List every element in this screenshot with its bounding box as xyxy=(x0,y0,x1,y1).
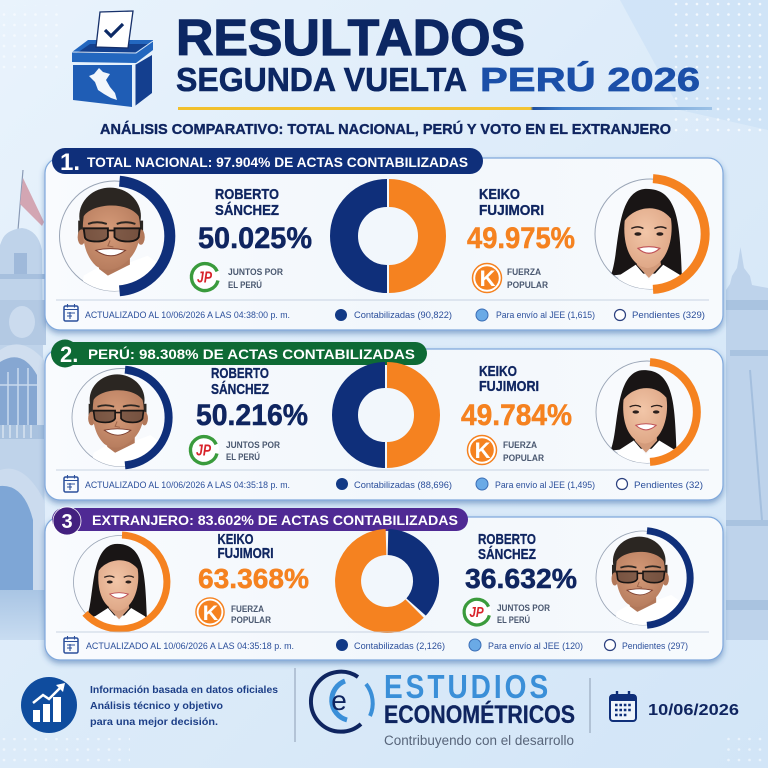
note text: Análisis técnico y objetivo xyxy=(90,700,223,712)
subtitle: ANÁLISIS COMPARATIVO: TOTAL NACIONAL, PERÚ Y VOTO EN EL EXTRANJERO xyxy=(100,120,671,138)
icon: calendar xyxy=(64,304,78,321)
party name: POPULAR xyxy=(231,615,271,626)
heading: Perú: 2. xyxy=(60,342,78,367)
portrait: Keiko Fujimori xyxy=(596,361,698,463)
portrait: Keiko Fujimori xyxy=(595,179,705,289)
title: Segunda Vuelta: SEGUNDA VUELTA xyxy=(176,61,467,98)
icon: rising bar chart xyxy=(21,677,77,733)
legend: Contabilizadas (90,822) xyxy=(354,310,452,321)
heading: extranjero: EXTRANJERO: 83.602% DE ACTAS CONTABILIZADAS xyxy=(92,512,458,528)
party name: FUERZA xyxy=(231,604,264,615)
vote share: 36.632% xyxy=(465,563,577,594)
logo word: Econométricos: ECONOMÉTRICOS xyxy=(384,700,575,729)
vote share: 50.216% xyxy=(196,399,308,432)
heading: extranjero xyxy=(52,507,468,535)
icon: date calendar xyxy=(610,691,636,721)
candidate name: SÁNCHEZ xyxy=(215,202,279,219)
date: 10/06/2026 xyxy=(648,702,739,719)
vote share: 63.368% xyxy=(198,563,309,594)
icon: calendar xyxy=(64,636,78,653)
party logo: Juntos por el Perú xyxy=(189,435,219,465)
legend: Para envío al JEE (1,615) xyxy=(496,310,595,321)
candidate name: KEIKO xyxy=(479,364,517,380)
portrait: Roberto Sánchez xyxy=(60,181,170,291)
candidate name xyxy=(479,364,539,395)
party name: POPULAR xyxy=(503,453,544,464)
legend xyxy=(336,639,688,652)
vote share: 49.975% xyxy=(467,222,575,255)
heading: total nacional: 1. xyxy=(60,149,80,176)
icon: ballot box xyxy=(72,11,153,107)
heading: extranjero: 3 xyxy=(61,511,73,533)
candidate name xyxy=(211,366,269,398)
rule under title xyxy=(178,107,712,110)
party name: EL PERÚ xyxy=(228,279,262,291)
party name: EL PERÚ xyxy=(226,451,260,463)
party logo: Juntos por el Perú xyxy=(190,262,220,292)
portrait: Roberto Sánchez xyxy=(72,368,170,466)
candidate name: ROBERTO xyxy=(478,532,536,548)
logo word: Estudios: ESTUDIOS xyxy=(384,669,551,706)
note text: para una mejor decisión. xyxy=(90,716,218,728)
party name: EL PERÚ xyxy=(497,614,530,626)
legend xyxy=(335,309,705,321)
donut chart xyxy=(348,542,426,620)
donut chart xyxy=(345,375,427,455)
candidate name: FUJIMORI xyxy=(479,203,544,219)
portrait: Roberto Sánchez xyxy=(596,531,690,625)
legend: Contabilizadas (2,126) xyxy=(354,641,445,652)
party logo: Fuerza Popular xyxy=(196,598,224,626)
legend: Para envío al JEE (120) xyxy=(488,641,583,652)
logo: Estudios Econométricos emblem: e xyxy=(331,685,347,716)
heading: total nacional xyxy=(52,148,483,176)
party name xyxy=(228,267,283,291)
party name xyxy=(503,440,544,464)
legend: Pendientes (32) xyxy=(634,480,703,491)
candidate name xyxy=(218,532,274,562)
candidate name xyxy=(478,532,536,563)
candidate name: ROBERTO xyxy=(211,366,269,382)
party logo: Fuerza Popular xyxy=(472,264,502,292)
icon: calendar xyxy=(64,475,78,492)
party name xyxy=(497,603,550,626)
party name: JUNTOS POR xyxy=(226,440,280,451)
candidate name: KEIKO xyxy=(479,187,520,203)
background building: right tower xyxy=(726,247,768,640)
party name xyxy=(231,604,271,626)
heading: total nacional: TOTAL NACIONAL: 97.904% DE ACTAS CONTABILIZADAS xyxy=(87,154,468,170)
candidate name: SÁNCHEZ xyxy=(211,381,269,398)
party name: JUNTOS POR xyxy=(497,603,550,614)
legend: Pendientes (297) xyxy=(622,641,688,652)
heading: Perú xyxy=(51,340,427,368)
party logo: Juntos por el Perú xyxy=(463,598,491,626)
title: Resultados: RESULTADOS xyxy=(176,9,525,66)
panel: Perú xyxy=(45,340,723,500)
party name: FUERZA xyxy=(503,440,537,451)
party name: POPULAR xyxy=(507,280,548,291)
candidate name xyxy=(215,187,279,219)
candidate name: ROBERTO xyxy=(215,187,279,203)
update timestamp: ACTUALIZADO AL 10/06/2026 A LAS 04:35:18 p. m. xyxy=(85,480,290,491)
party logo: Fuerza Popular xyxy=(468,436,496,464)
panel: total nacional xyxy=(45,148,723,330)
legend: Contabilizadas (88,696) xyxy=(354,480,452,491)
tagline: Contribuyendo con el desarrollo xyxy=(384,733,574,748)
candidate name: KEIKO xyxy=(218,532,254,548)
candidate name: FUJIMORI xyxy=(479,379,539,395)
party name xyxy=(226,440,280,463)
vote share: 49.784% xyxy=(461,399,572,432)
heading: Perú: PERÚ: 98.308% DE ACTAS CONTABILIZADAS xyxy=(88,345,415,362)
donut chart xyxy=(344,193,432,279)
background building: left palace and flag xyxy=(0,170,46,640)
party name xyxy=(507,267,548,291)
title: Perú 2026: PERÚ 2026 xyxy=(480,61,700,98)
party name: JUNTOS POR xyxy=(228,267,283,278)
portrait: Keiko Fujimori xyxy=(74,535,167,629)
legend: Pendientes (329) xyxy=(632,310,705,321)
note text: Información basada en datos oficiales xyxy=(90,684,278,696)
update timestamp: ACTUALIZADO AL 10/06/2026 A LAS 04:35:18 p. m. xyxy=(86,641,294,652)
party name: FUERZA xyxy=(507,267,541,278)
legend: Para envío al JEE (1,495) xyxy=(495,480,595,491)
logo: Estudios Econométricos emblem xyxy=(311,672,373,732)
candidate name: SÁNCHEZ xyxy=(478,546,536,563)
candidate name: FUJIMORI xyxy=(218,546,274,562)
legend xyxy=(336,478,703,491)
candidate name xyxy=(479,187,544,219)
update timestamp: ACTUALIZADO AL 10/06/2026 A LAS 04:38:00 p. m. xyxy=(85,310,290,321)
note text xyxy=(90,684,278,728)
vote share: 50.025% xyxy=(198,222,312,255)
panel: extranjero xyxy=(45,507,723,660)
